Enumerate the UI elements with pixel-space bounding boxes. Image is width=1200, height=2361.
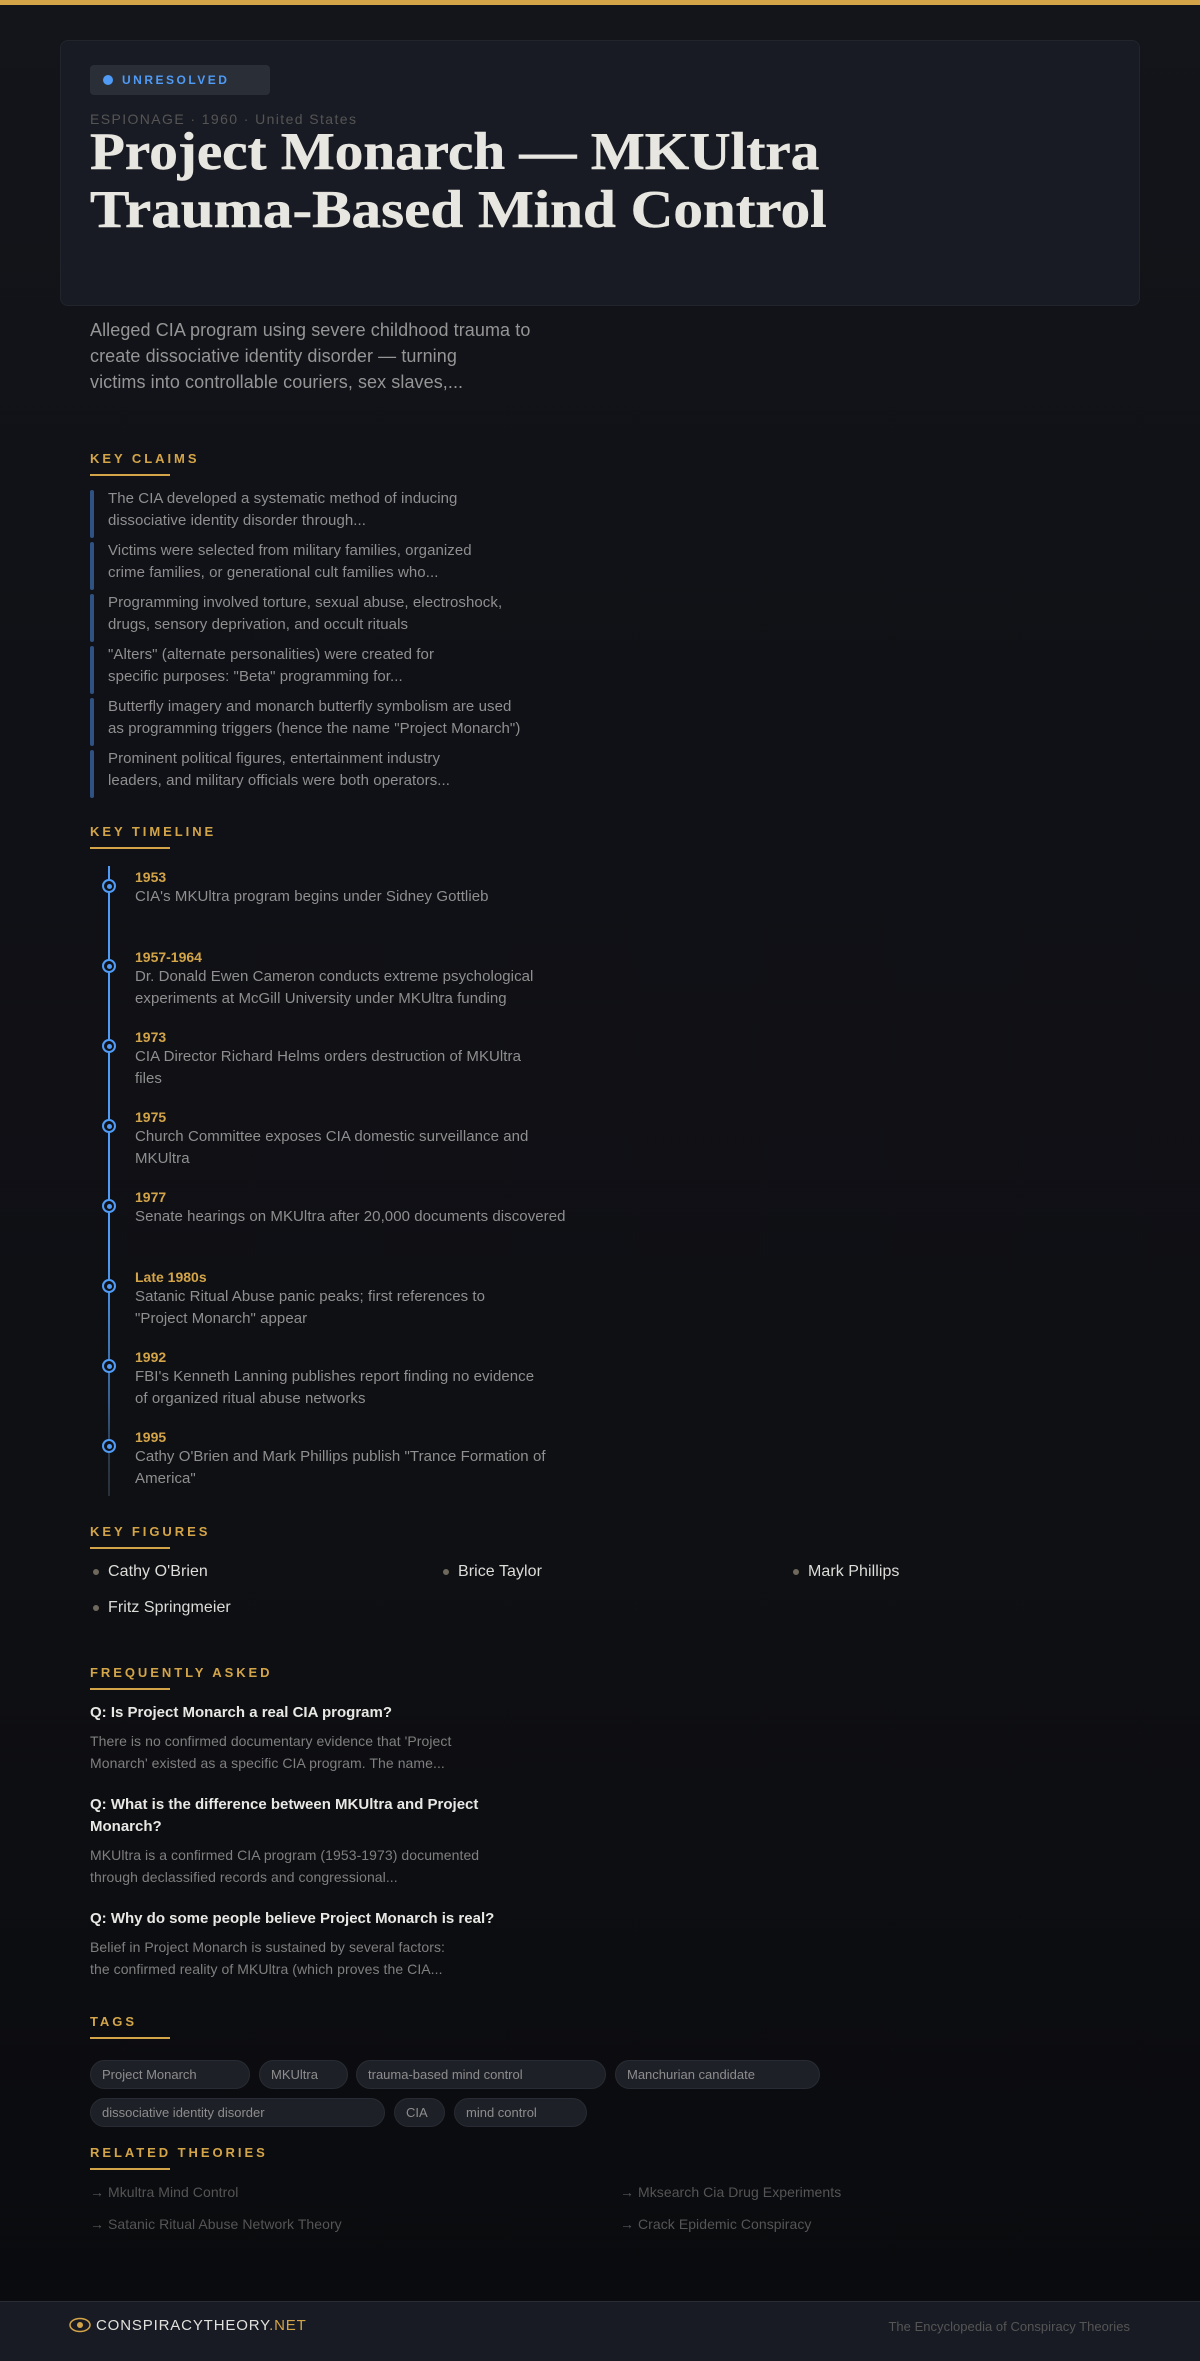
event 1977 [135,1189,566,1225]
logo wordmark: CONSPIRACYTHEORY.NET [96,2317,307,2334]
event 1995: 1995 [135,1429,166,1445]
event 1973 [135,1029,521,1087]
timeline [108,866,110,1496]
claim 4 [90,646,434,694]
claim 4: specific purposes: "Beta" programming for... [108,668,403,685]
event 1992: FBI's Kenneth Lanning publishes report finding no evidence [135,1368,534,1385]
figure: Cathy O'Brien: Cathy O'Brien [108,1563,208,1580]
event 1995 [135,1429,546,1487]
tag [90,2060,250,2089]
claim 3: drugs, sensory deprivation, and occult rituals [108,616,408,633]
faq 3 answer: the confirmed reality of MKUltra (which proves the CIA... [90,1961,443,1977]
related link: → Mkultra Mind Control [90,2184,238,2200]
heading: frequently asked: FREQUENTLY ASKED [90,1665,273,1680]
figure: Mark Phillips: Mark Phillips [808,1563,899,1580]
faq 1 answer: Monarch' existed as a specific CIA program. The name... [90,1755,445,1771]
top accent bar [0,0,1200,5]
faq 2 answer [90,1847,479,1885]
event 1975: Church Committee exposes CIA domestic surveillance and [135,1128,528,1145]
faq 2 answer: MKUltra is a confirmed CIA program (1953-1973) documented [90,1847,479,1863]
claim 1 [90,490,457,538]
event 1992: 1992 [135,1349,166,1365]
event late 1980s: Late 1980s [135,1269,207,1285]
faq 3 answer [90,1939,445,1977]
tag: dissociative identity disorder [102,2105,265,2120]
footer tagline: The Encyclopedia of Conspiracy Theories [888,2319,1130,2334]
event 1973: 1973 [135,1029,166,1045]
related link: → Mksearch Cia Drug Experiments [620,2184,841,2200]
event 1975: 1975 [135,1109,166,1125]
event 1975 [135,1109,528,1167]
claim 2 [90,542,472,590]
tag list [90,2060,820,2127]
claim 4: "Alters" (alternate personalities) were created for [108,646,434,663]
tag [394,2098,445,2127]
claim 3: Programming involved torture, sexual abuse, electroshock, [108,594,502,611]
event 1973: files [135,1070,162,1087]
description: create dissociative identity disorder — turning [90,346,457,366]
faq 2 answer: through declassified records and congressional... [90,1869,398,1885]
event 1995: America" [135,1470,196,1487]
marker 1977 [102,1199,116,1213]
faq 1 answer [90,1733,452,1771]
tag: Manchurian candidate [627,2067,755,2082]
claim 3 [90,594,502,642]
heading: key claims: KEY CLAIMS [90,451,199,466]
icon: eye logo [69,2318,91,2332]
tag: CIA [406,2105,428,2120]
timeline rail [108,866,110,1496]
marker 1973 [102,1039,116,1053]
related link: → Satanic Ritual Abuse Network Theory [90,2216,342,2232]
heading: related theories: RELATED THEORIES [90,2145,268,2160]
faq 2 question: Monarch? [90,1818,162,1835]
event 1957-1964: 1957-1964 [135,949,202,965]
description: victims into controllable couriers, sex slaves,... [90,372,463,392]
meta line: ESPIONAGE · 1960 · United States [90,111,357,127]
claim 2: crime families, or generational cult families who... [108,564,438,581]
event 1975: MKUltra [135,1150,190,1167]
faq 3 question: Q: Why do some people believe Project Monarch is real? [90,1910,494,1927]
tag [356,2060,606,2089]
title [90,123,827,239]
figure: Brice Taylor: Brice Taylor [458,1563,542,1580]
tag [454,2098,587,2127]
event 1957-1964 [135,949,533,1007]
marker 1995 [102,1439,116,1453]
event 1957-1964: Dr. Donald Ewen Cameron conducts extreme psychological [135,968,533,985]
claim 6 [90,750,450,798]
event 1995: Cathy O'Brien and Mark Phillips publish "Trance Formation of [135,1448,546,1465]
description [90,320,530,392]
marker 1992 [102,1359,116,1373]
heading: key figures: KEY FIGURES [90,1524,210,1539]
claim 2: Victims were selected from military families, organized [108,542,472,559]
event 1977: Senate hearings on MKUltra after 20,000 documents discovered [135,1208,566,1225]
footer [0,2301,1200,2361]
event 1992 [135,1349,534,1407]
faq 3 answer: Belief in Project Monarch is sustained by several factors: [90,1939,445,1955]
figure: Fritz Springmeier: Fritz Springmeier [108,1599,231,1616]
event late 1980s [135,1269,485,1327]
claim 6: leaders, and military officials were both operators... [108,772,450,789]
event 1953: 1953 [135,869,166,885]
marker 1953 [102,879,116,893]
heading: key timeline: KEY TIMELINE [90,824,216,839]
badge label: UNRESOLVED [122,73,229,87]
faq 2 question: Q: What is the difference between MKUltra and Project [90,1796,478,1813]
event late 1980s: "Project Monarch" appear [135,1310,307,1327]
claim 5 [90,698,520,746]
status badge [90,65,270,95]
claim 5: as programming triggers (hence the name "Project Monarch") [108,720,520,737]
tag: trauma-based mind control [368,2067,523,2082]
event 1992: of organized ritual abuse networks [135,1390,366,1407]
claim 1: dissociative identity disorder through... [108,512,366,529]
tag [90,2098,385,2127]
tag [615,2060,820,2089]
tag: mind control [466,2105,537,2120]
event 1973: CIA Director Richard Helms orders destruction of MKUltra [135,1048,521,1065]
event 1953: CIA's MKUltra program begins under Sidney Gottlieb [135,888,489,905]
claim 5: Butterfly imagery and monarch butterfly symbolism are used [108,698,511,715]
event 1977: 1977 [135,1189,166,1205]
claim 6: Prominent political figures, entertainment industry [108,750,440,767]
faq 1 answer: There is no confirmed documentary evidence that 'Project [90,1733,451,1749]
marker 1957 [102,959,116,973]
icon: status dot [103,75,113,85]
event 1953 [135,869,489,905]
event late 1980s: Satanic Ritual Abuse panic peaks; first references to [135,1288,485,1305]
tag: Project Monarch [102,2067,197,2082]
title: Project Monarch — MKUltra [90,123,819,181]
panel: header card [60,40,1140,306]
tag: MKUltra [271,2067,318,2082]
marker late 1980s [102,1279,116,1293]
tag [259,2060,348,2089]
heading: tags: TAGS [90,2014,137,2029]
related link: → Crack Epidemic Conspiracy [620,2216,811,2232]
faq 1 question: Q: Is Project Monarch a real CIA program? [90,1704,392,1721]
description: Alleged CIA program using severe childhood trauma to [90,320,530,340]
claim 1: The CIA developed a systematic method of inducing [108,490,457,507]
faq 2 question [90,1796,478,1835]
panel: key claims list [90,490,520,798]
marker 1975 [102,1119,116,1133]
title: Trauma-Based Mind Control [90,181,827,239]
event 1957-1964: experiments at McGill University under MKUltra funding [135,990,507,1007]
